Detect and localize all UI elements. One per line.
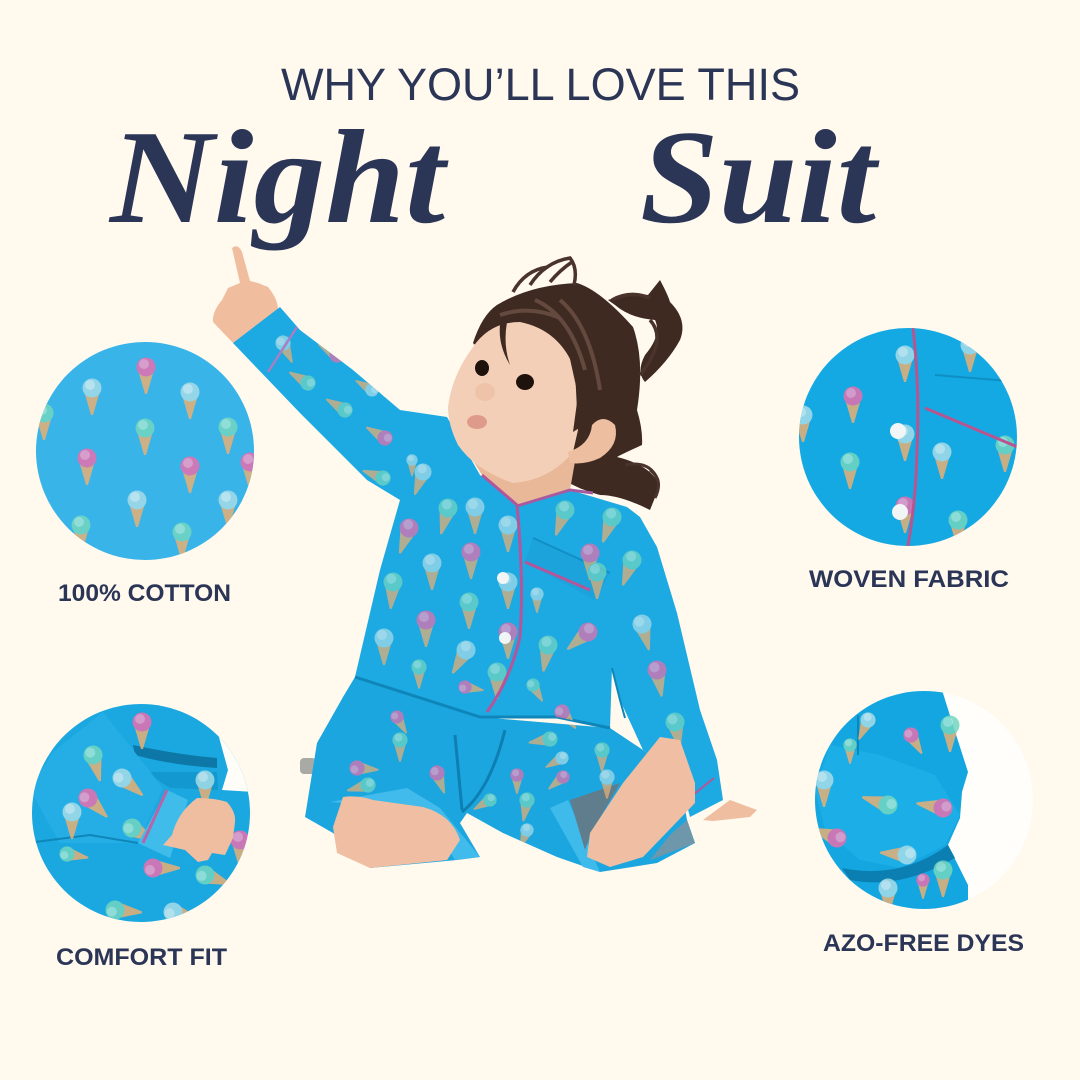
panel: 100% cotton fabric circle xyxy=(30,340,260,565)
eyes xyxy=(475,360,534,390)
face xyxy=(448,322,578,483)
label: comfort fit: COMFORT FIT xyxy=(56,944,227,971)
hand pointing up xyxy=(213,246,278,350)
hair back, wisps and pigtails xyxy=(473,258,682,510)
shirt trim and buttons xyxy=(268,327,714,795)
label: 100% cotton: 100% COTTON xyxy=(58,580,231,607)
nose xyxy=(475,383,495,401)
panel: comfort fit circle xyxy=(30,700,255,928)
label: woven fabric: WOVEN FABRIC xyxy=(809,566,1009,593)
bare feet xyxy=(333,737,695,868)
mouth xyxy=(467,415,487,429)
illustration: child wearing the night suit xyxy=(213,246,757,872)
ice cream print on the suit xyxy=(273,333,689,850)
title: why you'll love this: WHY YOU’LL LOVE THIS xyxy=(281,59,800,110)
label: azo-free dyes: AZO-FREE DYES xyxy=(823,930,1024,957)
stool edge behind child xyxy=(300,758,316,774)
heading: Night: Night xyxy=(108,103,449,251)
shirt xyxy=(233,307,723,817)
panel: woven fabric circle xyxy=(794,325,1025,550)
fringe hair over the forehead xyxy=(473,292,617,440)
panel: azo-free dyes circle xyxy=(808,690,1040,915)
neck xyxy=(465,448,577,505)
heading: Suit: Suit xyxy=(640,103,880,251)
trousers xyxy=(305,677,695,872)
resting hand xyxy=(703,800,757,821)
ear xyxy=(568,419,616,463)
lighter hair strands xyxy=(500,300,600,390)
